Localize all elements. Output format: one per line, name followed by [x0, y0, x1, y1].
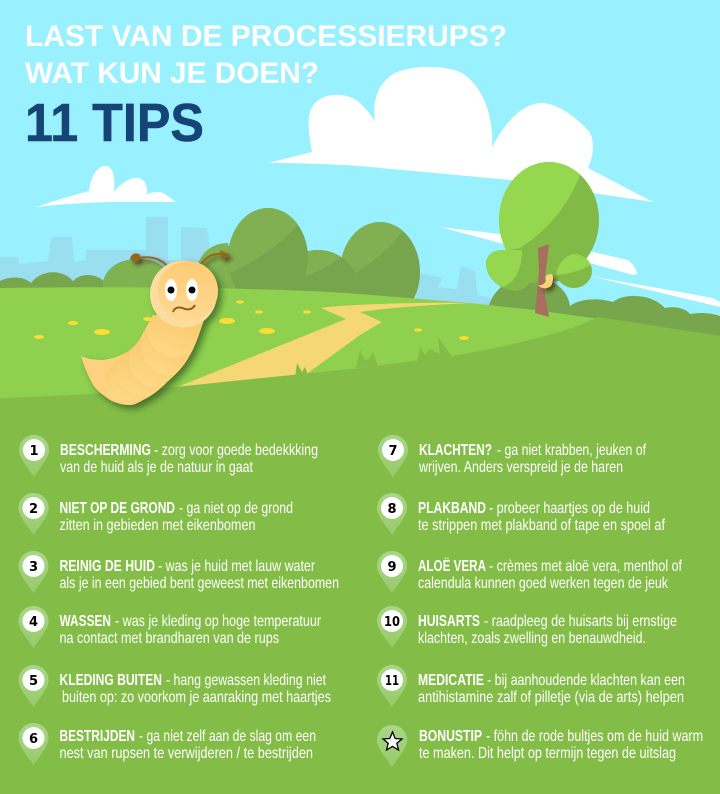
title: LAST VAN DE PROCESSIERUPS? — [25, 20, 507, 53]
pin 10 — [377, 606, 407, 648]
tip 1: BESCHERMING — [60, 442, 151, 459]
tip 5: KLEDING BUITEN — [60, 672, 162, 689]
tip 2: NIET OP DE GROND — [60, 500, 175, 517]
tip 6: - ga niet zelf aan de slag om een — [139, 728, 316, 745]
bushes — [0, 205, 720, 345]
head — [150, 260, 217, 328]
pin 6 — [18, 723, 48, 765]
pin 7 — [378, 435, 408, 477]
tip 4 — [18, 606, 322, 648]
tip 5: - hang gewassen kleding niet — [166, 672, 326, 689]
pin 9 — [377, 551, 407, 593]
path — [175, 303, 470, 388]
eyes — [165, 279, 198, 301]
small caterpillar — [538, 274, 553, 288]
tip 5: buiten op: zo voorkom je aanraking met haartjes — [62, 689, 331, 706]
pin 1 — [19, 435, 49, 477]
pin 4: 4 — [29, 615, 38, 630]
tip 4: - was je kleding op hoge temperatuur — [115, 613, 322, 630]
pin 2: 2 — [29, 502, 38, 517]
tip 8: PLAKBAND — [418, 500, 486, 517]
tip 7: KLACHTEN? — [419, 442, 492, 459]
title — [25, 20, 507, 153]
pin 1: 1 — [29, 444, 39, 459]
pin 11: 11 — [385, 674, 399, 689]
tip 3 — [18, 551, 339, 593]
tip 11: MEDICATIE — [418, 672, 484, 689]
tip 11 — [377, 665, 685, 707]
tip 7: - ga niet krabben, jeuken of — [497, 442, 646, 459]
pin 8: 8 — [387, 502, 397, 517]
pin with star — [377, 725, 407, 767]
title: WAT KUN JE DOEN? — [25, 57, 319, 90]
tip 5 — [18, 665, 331, 707]
pin 2 — [18, 493, 48, 535]
tip 1: - zorg voor goede bedekkking — [154, 442, 318, 459]
skyline — [0, 217, 495, 310]
tip 7: wrijven. Anders verspreid je de haren — [418, 459, 623, 476]
tip 4: WASSEN — [60, 613, 111, 630]
tip 2: zitten in gebieden met eikenbomen — [60, 517, 256, 534]
tip 6: nest van rupsen te verwijderen / te bestrijden — [60, 745, 313, 762]
flowers — [34, 300, 469, 340]
trunk — [535, 244, 549, 317]
tip 10: HUISARTS — [418, 613, 480, 630]
tip 9 — [377, 551, 682, 593]
tip 6 — [18, 723, 316, 765]
crown lower fill — [508, 250, 590, 287]
tip 1 — [19, 435, 318, 477]
bonus tip: BONUSTIP — [419, 728, 482, 745]
bonus tip — [377, 725, 703, 767]
pin 6: 6 — [29, 732, 38, 747]
pin 5: 5 — [29, 674, 38, 689]
tip 1: van de huid als je de natuur in gaat — [60, 459, 253, 476]
caterpillar — [78, 250, 230, 410]
tip 2 — [18, 493, 293, 535]
pin 8 — [377, 493, 407, 535]
tip 3: REINIG DE HUID — [60, 558, 155, 575]
pin 9: 9 — [387, 560, 397, 575]
tip 3: - was je huid met lauw water — [158, 558, 316, 575]
tree — [486, 155, 599, 317]
pin 4 — [18, 606, 48, 648]
pin 3 — [18, 551, 48, 593]
tip 10: klachten, zoals zwelling en benauwdheid. — [418, 630, 646, 647]
tip 8: te strippen met plakband of tape en spoel af — [418, 517, 665, 534]
tip 8: - probeer haartjes op de huid — [489, 500, 650, 517]
body — [78, 260, 218, 410]
tip 7 — [378, 435, 646, 477]
tip 10 — [377, 606, 677, 648]
grass tufts — [295, 337, 452, 378]
tip 4: na contact met brandharen van de rups — [60, 630, 279, 647]
tip 2: - ga niet op de grond — [179, 500, 293, 517]
tip 6: BESTRIJDEN — [60, 728, 135, 745]
streak clouds — [440, 227, 720, 307]
pin 11 — [377, 665, 407, 707]
tip 8 — [377, 493, 665, 535]
tip 3: als je in een gebied bent geweest met eikenbomen — [60, 575, 339, 592]
mouth — [173, 305, 195, 312]
large cloud — [268, 67, 653, 202]
tip 9: ALOË VERA — [418, 557, 486, 575]
front ground — [0, 317, 720, 794]
pin 10: 10 — [384, 615, 400, 630]
subtitle: 11 tips: 11 TIPS — [25, 93, 204, 153]
pin 5 — [18, 665, 48, 707]
pin 7: 7 — [388, 444, 398, 459]
pin 3: 3 — [29, 560, 38, 575]
back hill — [0, 287, 720, 420]
antennae — [130, 250, 230, 266]
small cloud — [37, 166, 176, 207]
